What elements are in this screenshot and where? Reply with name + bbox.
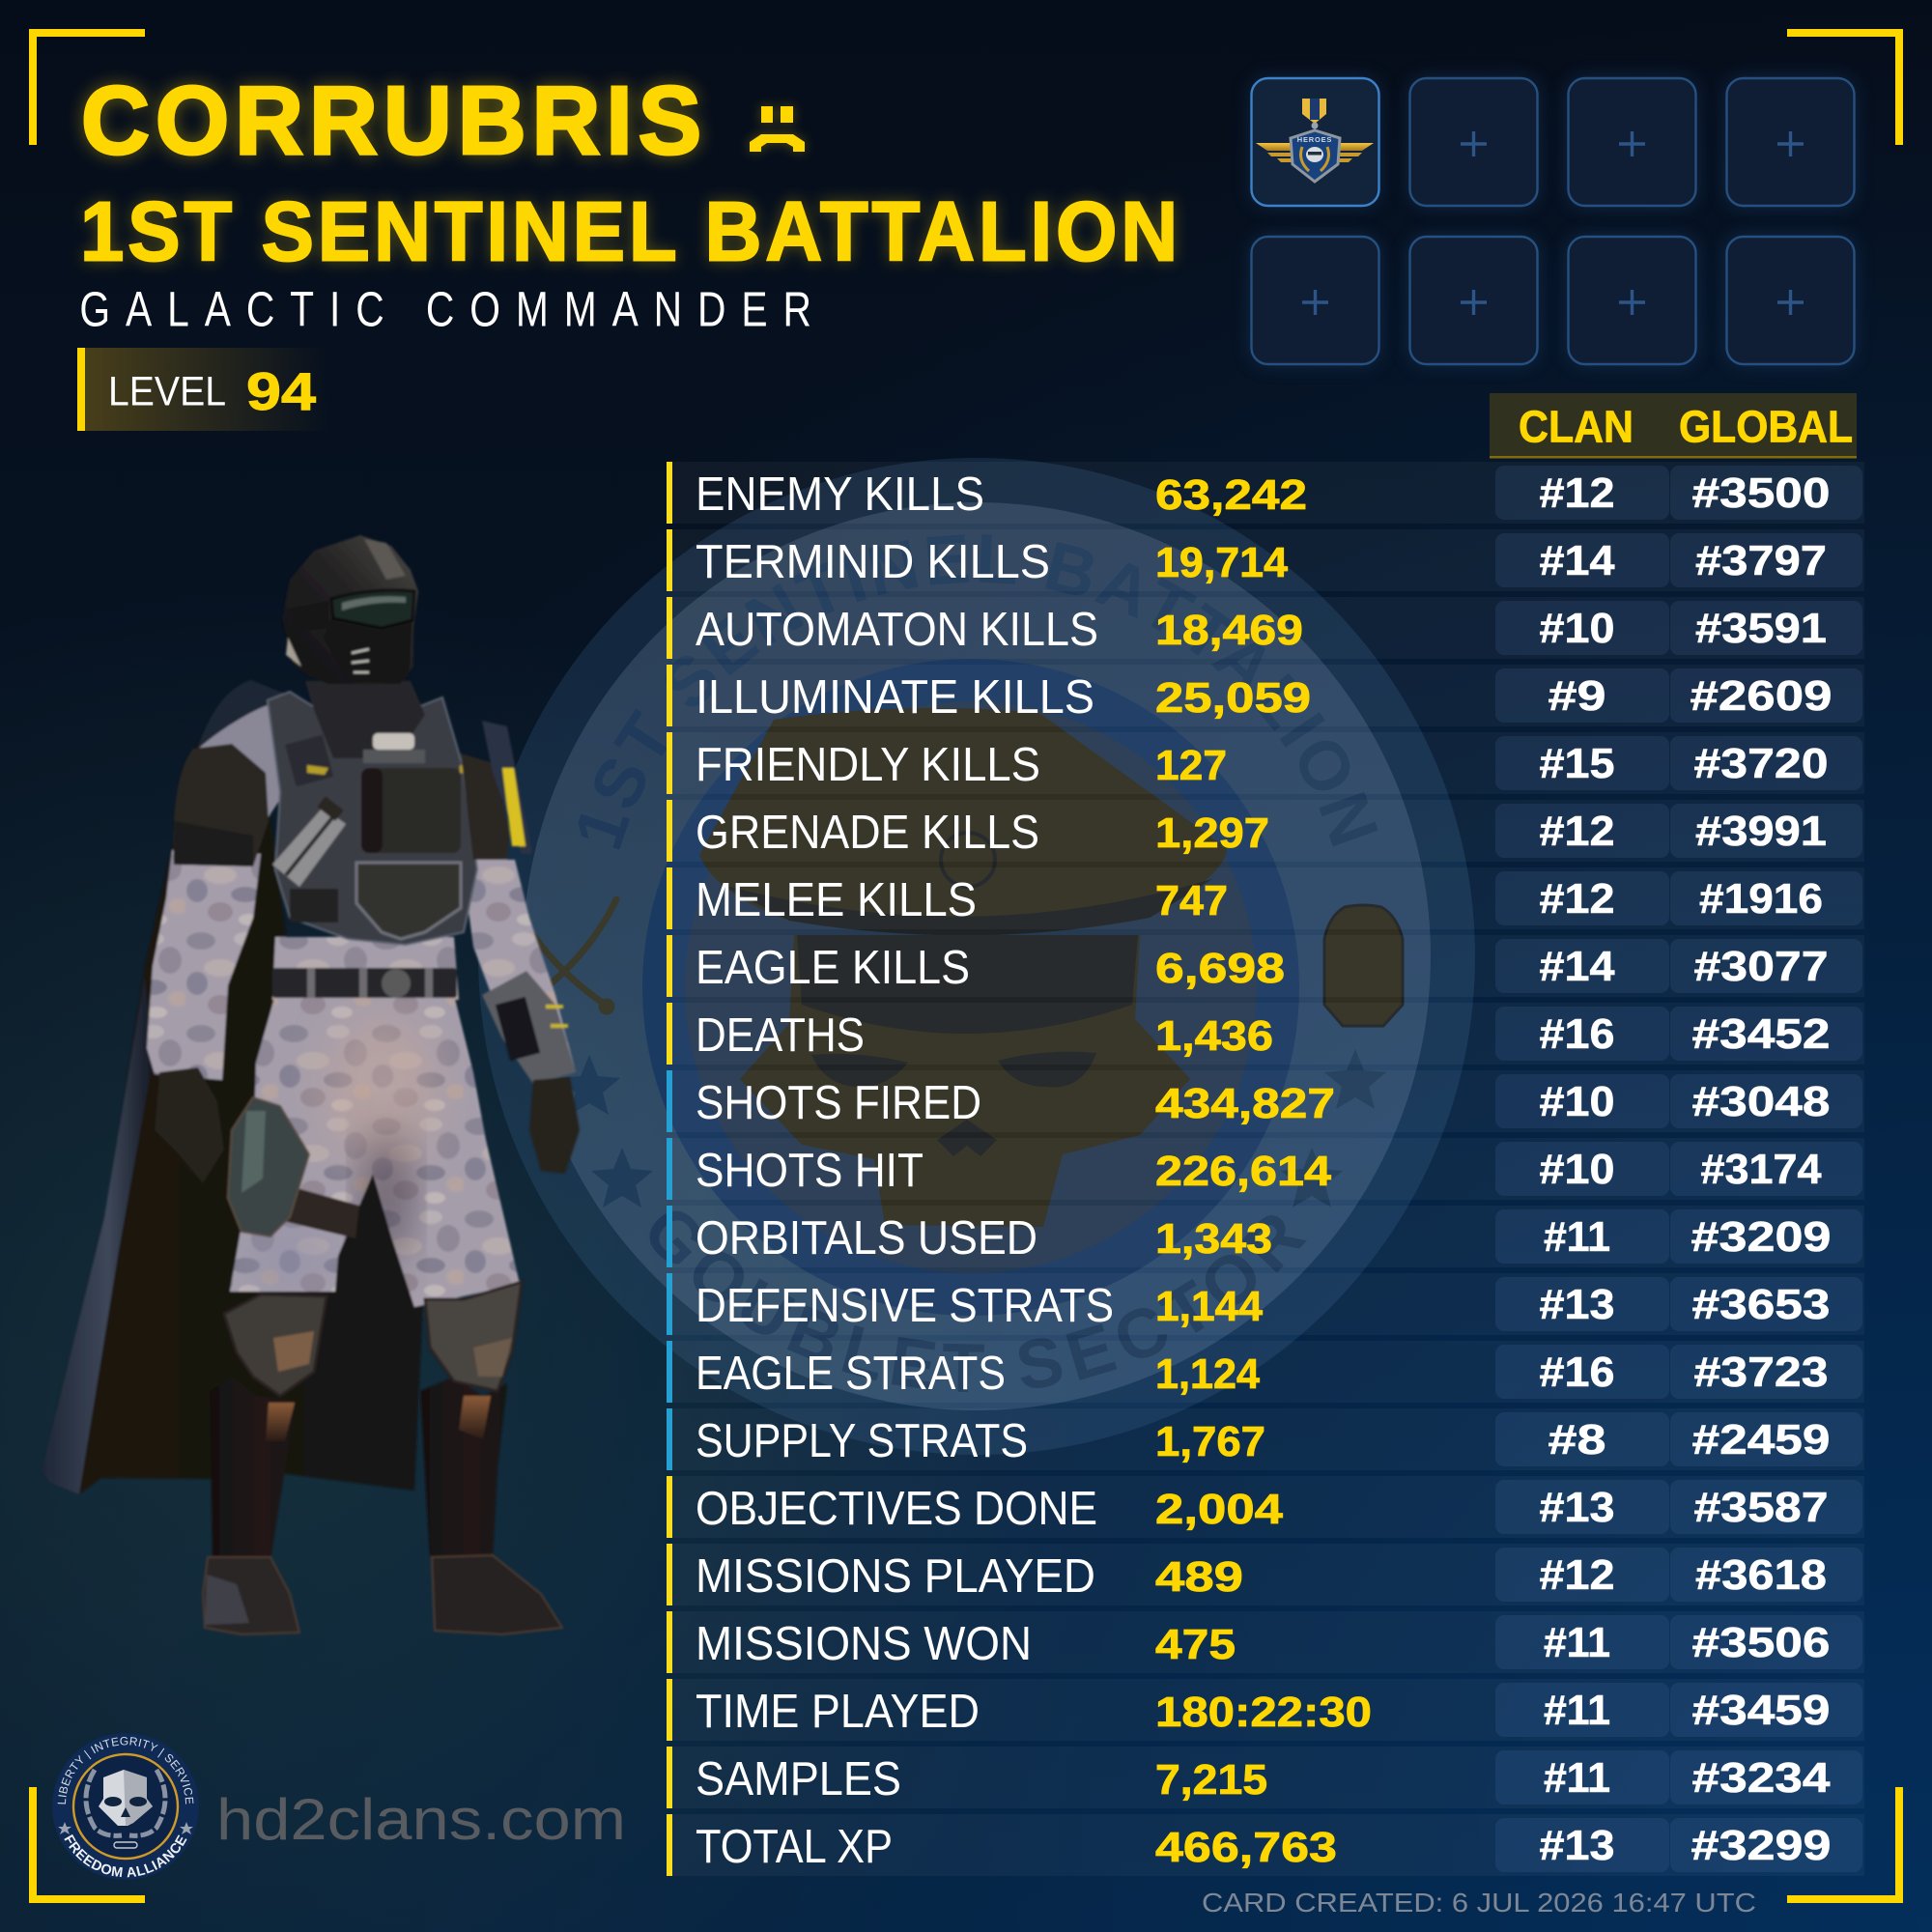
corner bracket: bottom left: [33, 1787, 145, 1899]
row: supply strats: #2459: [1692, 1417, 1830, 1463]
row: orbitals used: 1,343: [1155, 1215, 1272, 1263]
knee guards: [224, 1282, 522, 1396]
soldier figure: [42, 535, 580, 1634]
row: missions won: #3506: [1692, 1620, 1830, 1666]
freedom alliance emblem: FREEDOM ALLIANCE: [64, 1833, 187, 1878]
clan emblem watermark: 1ST SENTINEL BATTALION: [578, 534, 1378, 850]
row: samples: SAMPLES: [696, 1753, 901, 1805]
player name: CORRUBRIS: [81, 67, 707, 175]
row: orbitals used: #11: [1544, 1214, 1610, 1261]
thigh holster: [228, 1097, 359, 1238]
row: time played: #3459: [1692, 1688, 1830, 1734]
card creation date: CARD CREATED: 6 JUL 2026 16:47 UTC: [1202, 1888, 1756, 1918]
row: objectives done: #13: [1540, 1485, 1615, 1531]
row: friendly kills: #3720: [1694, 741, 1828, 787]
medal slots: [1252, 78, 1855, 364]
row: eagle kills: EAGLE KILLS: [696, 942, 970, 994]
row: objectives done: 2,004: [1155, 1486, 1284, 1533]
row: illuminate kills: #2609: [1690, 673, 1832, 720]
row: total xp: 466,763: [1155, 1824, 1337, 1871]
column headers: [1490, 393, 1857, 458]
row: deaths: [667, 1003, 1864, 1065]
row: eagle kills: #3077: [1694, 944, 1828, 990]
empty slot 4: [1727, 78, 1855, 206]
row: shots fired: #10: [1540, 1079, 1615, 1125]
row: eagle kills: [667, 935, 1864, 997]
row: orbitals used: #3209: [1690, 1214, 1832, 1261]
row: defensive strats: DEFENSIVE STRATS: [696, 1280, 1114, 1332]
row: melee kills: MELEE KILLS: [696, 874, 977, 926]
row: terminid kills: 19,714: [1155, 539, 1289, 586]
row: objectives done: [667, 1476, 1864, 1538]
column headers: CLAN: [1519, 402, 1634, 452]
row: shots fired: [667, 1070, 1864, 1132]
row: supply strats: SUPPLY STRATS: [696, 1415, 1028, 1467]
medal slot: heroes medal: [1252, 78, 1379, 206]
row: shots fired: 434,827: [1155, 1080, 1335, 1127]
row: automaton kills: AUTOMATON KILLS: [696, 604, 1098, 656]
row: samples: [667, 1747, 1864, 1808]
row: supply strats: [667, 1408, 1864, 1470]
row: eagle kills: #14: [1540, 944, 1615, 990]
row: deaths: #16: [1540, 1011, 1615, 1058]
row: missions won: 475: [1155, 1621, 1236, 1668]
row: shots fired: #3048: [1692, 1079, 1830, 1125]
row: orbitals used: ORBITALS USED: [696, 1212, 1037, 1264]
row: enemy kills: #3500: [1692, 470, 1830, 517]
empty slot 8: [1727, 237, 1855, 364]
website text: hd2clans.com: [216, 1787, 626, 1852]
row: terminid kills: #14: [1540, 538, 1615, 584]
watermark: crossed sabres: [533, 899, 616, 1011]
row: time played: 180:22:30: [1155, 1689, 1372, 1736]
row: supply strats: #8: [1548, 1417, 1605, 1463]
forearm device: [482, 971, 576, 1084]
clan name: 1ST SENTINEL BATTALION: [80, 185, 1181, 278]
medal slot: heroes medal: HEROES: [1297, 135, 1332, 144]
row: shots hit: [667, 1138, 1864, 1200]
column headers: GLOBAL: [1679, 402, 1853, 452]
level box: 94: [246, 361, 316, 421]
row: automaton kills: [667, 597, 1864, 659]
row: illuminate kills: #9: [1548, 673, 1605, 720]
boots: [203, 1377, 562, 1634]
row: objectives done: OBJECTIVES DONE: [696, 1483, 1097, 1535]
row: deaths: 1,436: [1155, 1012, 1273, 1060]
row: missions played: MISSIONS PLAYED: [696, 1550, 1095, 1603]
magazines: [272, 796, 346, 887]
stats table: [667, 462, 1864, 1876]
row: friendly kills: #15: [1540, 741, 1615, 787]
row: automaton kills: #3591: [1695, 606, 1827, 652]
shoulder beacon: [482, 721, 532, 854]
row: grenade kills: #12: [1540, 809, 1615, 855]
row: defensive strats: #13: [1540, 1282, 1615, 1328]
row: total xp: [667, 1814, 1864, 1876]
row: defensive strats: #3653: [1692, 1282, 1830, 1328]
tactical vest: [268, 681, 477, 945]
row: melee kills: #1916: [1699, 876, 1823, 923]
row: eagle kills: 6,698: [1155, 945, 1285, 992]
row: terminid kills: TERMINID KILLS: [696, 536, 1050, 588]
row: automaton kills: 18,469: [1155, 607, 1303, 654]
shoulder pads: [173, 744, 509, 867]
row: total xp: #13: [1540, 1823, 1615, 1869]
row: illuminate kills: 25,059: [1155, 674, 1311, 722]
clan emblem watermark: GOUBLET SECTOR: [649, 1211, 1307, 1392]
row: missions played: #12: [1540, 1552, 1615, 1599]
left arm: [147, 850, 261, 1080]
row: terminid kills: [667, 529, 1864, 591]
row: friendly kills: FRIENDLY KILLS: [696, 739, 1040, 791]
icon: frown face: [750, 106, 805, 152]
row: deaths: DEATHS: [696, 1009, 865, 1062]
row: orbitals used: [667, 1206, 1864, 1267]
row: supply strats: 1,767: [1155, 1418, 1265, 1465]
watermark: grenade: [1324, 905, 1403, 1026]
freedom alliance emblem: LIBERTY | INTEGRITY | SERVICE: [58, 1737, 193, 1804]
right arm: [462, 860, 576, 1082]
row: grenade kills: [667, 800, 1864, 862]
cape: [42, 680, 425, 1494]
row: samples: 7,215: [1155, 1756, 1267, 1804]
row: illuminate kills: ILLUMINATE KILLS: [696, 671, 1094, 724]
empty slot 6: [1410, 237, 1538, 364]
row: total xp: #3299: [1690, 1823, 1832, 1869]
row: missions won: #11: [1544, 1620, 1610, 1666]
row: melee kills: [667, 867, 1864, 929]
lower torso: [272, 937, 459, 1000]
corner bracket: top right: [1787, 33, 1899, 145]
row: shots hit: 226,614: [1155, 1148, 1332, 1195]
row: time played: #11: [1544, 1688, 1610, 1734]
row: missions played: #3618: [1695, 1552, 1827, 1599]
row: melee kills: 747: [1155, 877, 1228, 924]
corner bracket: bottom right: [1787, 1787, 1899, 1899]
row: friendly kills: [667, 732, 1864, 794]
belt: [272, 968, 457, 998]
empty slot 7: [1569, 237, 1696, 364]
row: illuminate kills: [667, 665, 1864, 726]
row: samples: #11: [1544, 1755, 1610, 1802]
freedom alliance emblem: [52, 1733, 199, 1880]
row: missions played: 489: [1155, 1553, 1243, 1601]
row: terminid kills: #3797: [1695, 538, 1827, 584]
row: eagle strats: EAGLE STRATS: [696, 1348, 1006, 1400]
level box: LEVEL: [108, 369, 226, 415]
row: time played: TIME PLAYED: [696, 1686, 980, 1738]
row: grenade kills: GRENADE KILLS: [696, 807, 1039, 859]
upper sleeve: [185, 705, 285, 821]
row: enemy kills: ENEMY KILLS: [696, 469, 984, 521]
empty slot 3: [1569, 78, 1696, 206]
row: objectives done: #3587: [1694, 1485, 1828, 1531]
row: grenade kills: #3991: [1695, 809, 1827, 855]
row: eagle strats: 1,124: [1155, 1350, 1261, 1398]
row: missions played: [667, 1544, 1864, 1605]
helmet: [282, 535, 418, 684]
level box: [77, 348, 328, 431]
row: total xp: TOTAL XP: [696, 1821, 893, 1873]
row: grenade kills: 1,297: [1155, 810, 1269, 857]
row: shots hit: SHOTS HIT: [696, 1145, 923, 1197]
row: missions won: [667, 1611, 1864, 1673]
legs: [230, 995, 520, 1307]
row: defensive strats: 1,144: [1155, 1283, 1264, 1330]
row: shots fired: SHOTS FIRED: [696, 1077, 981, 1129]
row: eagle strats: #16: [1540, 1350, 1615, 1396]
row: deaths: #3452: [1692, 1011, 1830, 1058]
clan emblem watermark: [478, 458, 1475, 1455]
row: defensive strats: [667, 1273, 1864, 1335]
row: samples: #3234: [1692, 1755, 1831, 1802]
watermark: skull with peaked cap: [699, 708, 1227, 1227]
row: melee kills: #12: [1540, 876, 1615, 923]
row: enemy kills: [667, 462, 1864, 524]
row: missions won: MISSIONS WON: [696, 1618, 1032, 1670]
row: automaton kills: #10: [1540, 606, 1615, 652]
row: enemy kills: #12: [1540, 470, 1615, 517]
rank title: GALACTIC COMMANDER: [79, 281, 811, 337]
row: time played: [667, 1679, 1864, 1741]
empty slot 5: [1252, 237, 1379, 364]
gloves: [155, 1067, 580, 1183]
empty slot 2: [1410, 78, 1538, 206]
row: shots hit: #3174: [1700, 1147, 1822, 1193]
corner bracket: top left: [33, 33, 145, 145]
row: eagle strats: #3723: [1694, 1350, 1828, 1396]
row: friendly kills: 127: [1155, 742, 1227, 789]
row: enemy kills: 63,242: [1155, 471, 1307, 519]
row: eagle strats: [667, 1341, 1864, 1403]
row: shots hit: #10: [1540, 1147, 1615, 1193]
